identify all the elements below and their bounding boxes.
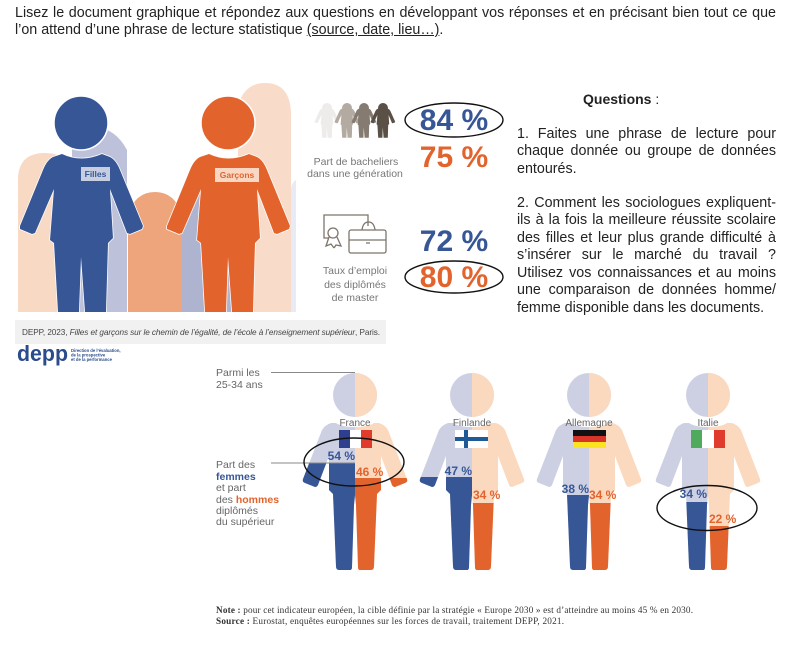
questions text: une comparaison de données homme/ xyxy=(517,282,776,298)
questions text xyxy=(517,126,776,316)
note and source: Source : Eurostat, enquêtes européennes sur les forces de travail, traitement DEPP, 2021. xyxy=(216,616,564,626)
label: share of graduates: et part xyxy=(216,482,246,494)
figure: Finland: 34 % xyxy=(473,488,501,502)
logo: depp: de la prospective xyxy=(71,352,106,358)
questions text: des filles et leur plus grande difficulté à xyxy=(517,230,776,246)
icon: group of people xyxy=(315,103,395,138)
figure: Italy: 22 % xyxy=(709,512,737,526)
figure: Finland: Finlande xyxy=(453,418,492,429)
label: share of graduates: femmes xyxy=(216,471,256,483)
label: employment rate of master graduates xyxy=(323,265,387,304)
label: age group: 25-34 ans xyxy=(216,379,263,391)
heading: questions: Questions : xyxy=(583,91,659,107)
figure: Finland xyxy=(420,373,524,570)
instructions text: Lisez le document graphique et répondez aux questions en développant vos réponses et en précisant bien tout ce que xyxy=(15,5,776,21)
figure: Germany: Allemagne xyxy=(565,418,613,429)
source band xyxy=(15,320,386,344)
instructions text xyxy=(15,5,776,38)
figure: boys xyxy=(167,96,290,312)
callout: circle around 84 % xyxy=(405,103,503,137)
label: employment rate of master graduates: des diplômés xyxy=(324,279,386,291)
label: age group: Parmi les xyxy=(216,367,260,379)
figure: Germany: 34 % xyxy=(589,488,617,502)
figure: France: 46 % xyxy=(356,465,384,479)
instructions text: l’on attend d’une phrase de lecture statistique (source, date, lieu…). xyxy=(15,22,443,38)
panel: girls and boys illustration xyxy=(18,83,296,312)
label: share of graduates xyxy=(216,459,279,528)
callout: circle around 80 % xyxy=(405,261,503,293)
figure: 80 % boys: 80 % xyxy=(420,261,488,294)
label: share of baccalaureate holders: dans une génération xyxy=(307,168,403,180)
logo: depp: depp xyxy=(17,341,68,366)
questions text: Utilisez vos connaissances et au moins xyxy=(517,265,776,281)
questions text: ils à la fois la meilleure réussite scolaire xyxy=(517,212,776,228)
figure: Germany: 38 % xyxy=(562,482,589,496)
label: employment rate of master graduates: Taux d’emploi xyxy=(323,265,387,277)
logo: depp: Direction de l’évaluation, xyxy=(71,348,121,353)
label: share of baccalaureate holders: Part de bacheliers xyxy=(314,156,398,168)
label: share of graduates: du supérieur xyxy=(216,516,275,528)
questions text: s’insérer sur le marché du travail ? xyxy=(517,247,776,263)
logo: depp: et de la performance xyxy=(71,357,113,362)
questions text: entourés. xyxy=(517,161,577,177)
figure: girls xyxy=(20,96,143,312)
icon: diploma and briefcase xyxy=(324,215,386,253)
note and source xyxy=(216,605,693,626)
figure: France xyxy=(303,373,407,570)
figure: France: France xyxy=(339,418,371,429)
leader line: age group xyxy=(271,372,355,374)
source band: DEPP, 2023, Filles et garçons sur le chemin de l’égalité, de l’école à l’enseignement supérieur, Paris. xyxy=(22,328,380,337)
label: share of graduates: diplômés xyxy=(216,505,258,517)
figure: France: 54 % xyxy=(328,449,355,463)
label: share of baccalaureate holders xyxy=(307,156,403,180)
figure: Finland: 47 % xyxy=(445,464,472,478)
logo: depp xyxy=(17,341,121,366)
questions text: 1. Faites une phrase de lecture pour xyxy=(517,126,776,142)
figure: 72 % girls: 72 % xyxy=(420,225,488,258)
illustrated document xyxy=(15,83,760,626)
note and source: Note : pour cet indicateur européen, la cible définie par la stratégie « Europe 2030 » est d’atteindre au moins 45 % en 2030. xyxy=(216,605,693,615)
figure: boys: Garçons xyxy=(220,170,255,180)
figure: Italy: Italie xyxy=(697,418,719,429)
figure: Italy xyxy=(656,373,760,570)
label: employment rate of master graduates: de master xyxy=(332,292,379,304)
label: share of graduates: des hommes xyxy=(216,494,279,506)
figure: 84 % girls: 84 % xyxy=(420,104,488,137)
label: share of graduates: Part des xyxy=(216,459,255,471)
questions text: 2. Comment les sociologues expliquent- xyxy=(517,195,776,211)
figure: Germany xyxy=(537,373,641,570)
callout: circle around Italy xyxy=(657,486,757,530)
leader line: share of graduates xyxy=(271,462,355,464)
questions text: chaque donnée ou groupe de données xyxy=(517,143,776,159)
figure: Italy: 34 % xyxy=(680,487,707,501)
figure: 75 % boys: 75 % xyxy=(420,141,488,174)
figure: girls: Filles xyxy=(85,169,107,179)
callout: circle around France xyxy=(304,438,404,486)
questions text: femme disponible dans les documents. xyxy=(517,300,764,316)
label: age group xyxy=(216,367,263,391)
